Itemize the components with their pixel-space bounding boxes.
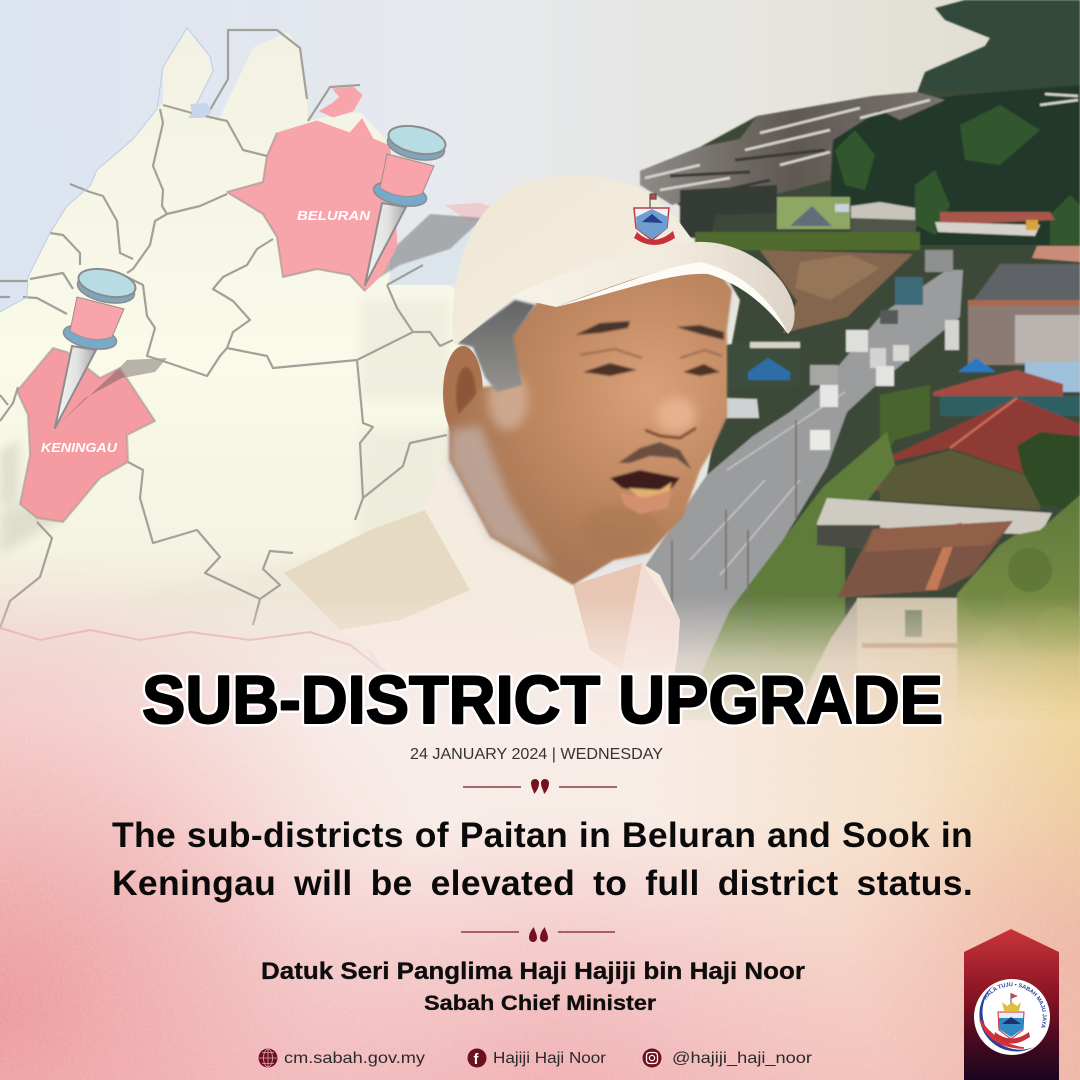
brown roof	[837, 521, 1013, 598]
verge with shrubs	[880, 385, 930, 460]
cap brim underside	[556, 262, 788, 334]
cap crown	[452, 175, 697, 345]
pin: Beluran	[365, 121, 448, 285]
title: SUB-DISTRICT UPGRADE	[142, 662, 943, 738]
eyebrows	[575, 321, 724, 340]
date: 24 JANUARY 2024 | WEDNESDAY	[410, 746, 663, 763]
pale shade on cheek and neck	[488, 370, 528, 430]
label: Keningau: KENINGAU	[41, 440, 118, 455]
footer: website	[258, 1048, 425, 1068]
footer: facebook	[468, 1048, 607, 1068]
salmon roof	[1032, 246, 1080, 262]
portrait: man in white cap	[284, 175, 795, 690]
stilt house roofs	[640, 92, 945, 205]
pale-grey building with slate roof	[973, 264, 1080, 301]
palm trees	[830, 85, 1080, 245]
title: SUB-DISTRICT UPGRADE	[142, 662, 943, 738]
cap emblem	[634, 194, 675, 245]
pink gradients	[0, 540, 1080, 1080]
mouth	[610, 470, 680, 492]
grass strip	[695, 232, 920, 250]
moustache	[618, 442, 692, 470]
big red roof	[867, 398, 1080, 479]
footer: instagram	[642, 1048, 813, 1068]
face	[449, 262, 732, 585]
foreground tree	[957, 495, 1080, 720]
shadow of the Keningau pin	[58, 358, 167, 425]
dark shed	[680, 185, 777, 240]
statement line one: The sub-districts of Paitan in Beluran and Sook in	[112, 815, 973, 855]
dirt lot	[760, 250, 913, 333]
ear	[443, 346, 483, 440]
opening quote divider	[463, 779, 617, 794]
open shed	[880, 450, 1040, 510]
nose	[645, 428, 696, 438]
collar left	[425, 460, 590, 645]
bottom wash fading the photo into pink	[0, 590, 1080, 1080]
speaker role: Sabah Chief Minister	[424, 991, 657, 1015]
neck opening	[573, 563, 642, 670]
utility poles	[672, 420, 796, 640]
icon: globe	[258, 1048, 278, 1068]
river traces under the shirt	[365, 630, 400, 668]
district: Keningau	[17, 348, 155, 522]
coast lines	[0, 28, 213, 312]
footer: website: cm.sabah.gov.my	[284, 1050, 425, 1067]
headland with forest	[915, 0, 1080, 110]
district borders	[0, 30, 453, 628]
shadow of the Beluran pin	[367, 214, 483, 285]
grass verge	[680, 432, 895, 720]
label: Beluran: BELURAN	[297, 208, 371, 223]
speaker name: Datuk Seri Panglima Haji Hajiji bin Haji Noor	[261, 958, 805, 985]
statement line two: Keningau will be elevated to full district status.	[112, 863, 973, 903]
badge with state emblem	[964, 929, 1059, 1080]
tree next to shed	[1017, 432, 1080, 510]
town base	[640, 90, 1080, 720]
bay and coast	[390, 205, 500, 285]
eyes	[583, 363, 720, 376]
corrugated roof	[817, 498, 1052, 535]
footer: instagram: @hajiji_haji_noor	[672, 1050, 813, 1067]
footer: facebook: Hajiji Haji Noor	[493, 1050, 607, 1067]
market stalls and cars	[725, 335, 800, 390]
low buildings by the road	[851, 208, 916, 236]
pink state border	[0, 628, 385, 672]
emblem: HALA TUJU • SABAH MAJU JAYA	[983, 982, 1047, 1028]
land mass	[0, 28, 460, 690]
house wall with window	[857, 598, 957, 720]
closing quote divider	[461, 927, 615, 942]
faded photo showing through the map	[0, 440, 60, 555]
district: Beluran	[227, 87, 397, 291]
icon: facebook: f	[474, 1051, 480, 1068]
pavement	[790, 600, 900, 720]
hair	[456, 300, 535, 392]
emblem	[974, 979, 1050, 1055]
pin: Keningau	[55, 264, 138, 428]
shirt	[284, 460, 680, 690]
road	[640, 270, 963, 720]
collar right	[622, 563, 680, 670]
map of Sabah	[0, 28, 500, 690]
blue tents	[958, 358, 996, 372]
upper red roof	[933, 370, 1063, 400]
cap brim	[511, 242, 795, 334]
background sky and sea	[0, 0, 1080, 700]
photo: town on the shoreline	[640, 0, 1080, 720]
billboard	[777, 197, 850, 229]
icon: instagram	[642, 1048, 662, 1068]
